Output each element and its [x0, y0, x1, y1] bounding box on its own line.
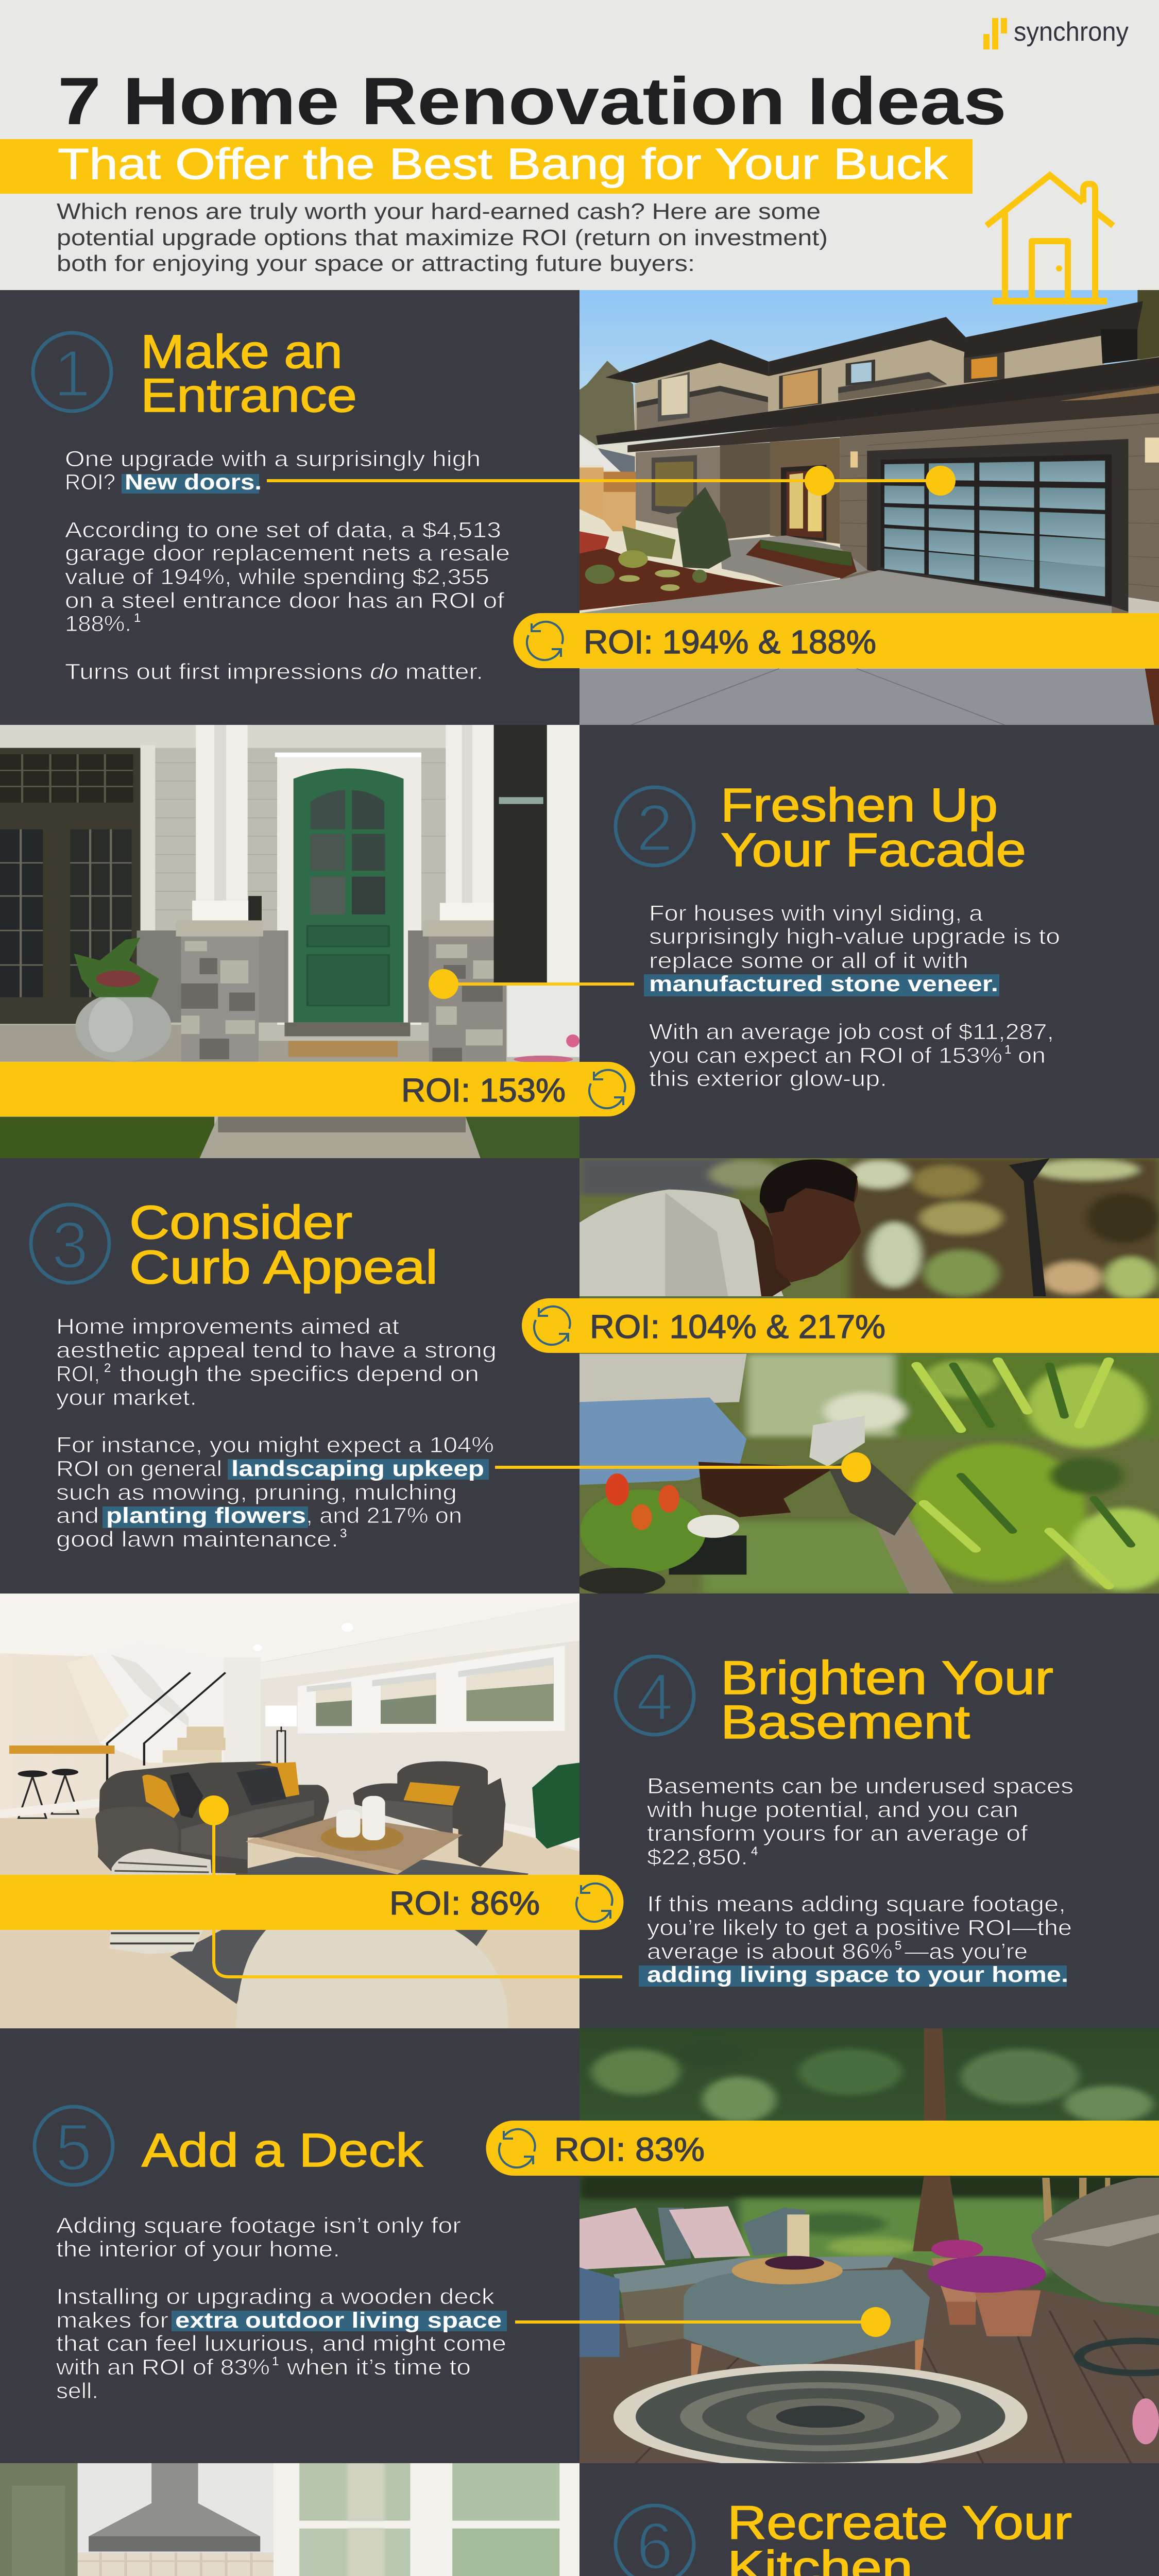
- body text: new doors: Turns out first impressions do matter.: [65, 659, 483, 684]
- body text: new doors: New doors.: [125, 470, 262, 495]
- body text: basements: adding living space to your home.: [647, 1962, 1068, 1987]
- ROI badge 5: [486, 2121, 1159, 2176]
- body text: stone veneer: you can expect an ROI of 153%: [649, 1043, 1002, 1068]
- step number 1: 1: [54, 337, 91, 411]
- step number 2: 2: [636, 791, 673, 865]
- icon: refresh arrows: [534, 1307, 570, 1345]
- body text: landscaping: [56, 1314, 497, 1552]
- panel 1: make an entrance: [0, 290, 1159, 725]
- body text: new doors: 188%.: [65, 612, 131, 636]
- callout line and dot: [199, 1795, 622, 1977]
- step number 6: [616, 2505, 694, 2576]
- icon: refresh arrows: [589, 1070, 625, 1108]
- callout line and dot: [515, 2307, 891, 2337]
- body text: stone veneer: For houses with vinyl siding, a: [649, 901, 983, 926]
- step number 1: [33, 333, 111, 411]
- panel 6: recreate your kitchen: [0, 2463, 1159, 2576]
- ROI badge 2: [0, 1062, 635, 1116]
- body text: basements: Basements can be underused spaces: [647, 1774, 1073, 1799]
- ROI badge 1: [513, 613, 1159, 668]
- subtitle band: [0, 139, 973, 194]
- body text: new doors: garage door replacement nets a resale: [65, 541, 510, 566]
- step number 5: [35, 2107, 113, 2185]
- ROI badge 3: ROI: 104% & 217%: [590, 1308, 885, 1345]
- ROI badge 2: ROI: 153%: [401, 1072, 566, 1109]
- body text: deck: extra outdoor living space: [175, 2308, 502, 2333]
- header logo: [983, 17, 1129, 49]
- panel 2: freshen up your facade: [0, 725, 1159, 1158]
- body text: basements: 5: [895, 1939, 901, 1953]
- icon: refresh arrows: [499, 2129, 535, 2167]
- step number 2: [616, 787, 694, 866]
- icon: refresh arrows: [576, 1884, 612, 1922]
- body text: stone veneer: on: [1018, 1043, 1046, 1068]
- heading: freshen up your facade: [721, 779, 1026, 876]
- ROI badge 3: [522, 1298, 1159, 1353]
- intro text: Which renos are truly worth your hard-earned cash? Here are some: [57, 199, 821, 224]
- body text: stone veneer: replace some or all of it with: [649, 948, 968, 973]
- body text: new doors: value of 194%, while spending $2,355: [65, 565, 489, 589]
- body text: landscaping: aesthetic appeal tend to have a strong: [56, 1338, 497, 1363]
- body text: new doors: According to one set of data, a $4,513: [65, 518, 501, 543]
- body text: new doors: ROI?: [65, 470, 115, 495]
- body text: deck: 1: [272, 2354, 279, 2368]
- body text: stone veneer: 1: [1004, 1043, 1011, 1057]
- body text: basements: 4: [751, 1844, 758, 1858]
- body text: stone veneer: this exterior glow-up.: [649, 1066, 887, 1091]
- body text: deck: makes for: [56, 2308, 168, 2333]
- body text: new doors: on a steel entrance door has an ROI of: [65, 588, 505, 613]
- body text: landscaping: though the specifics depend on: [120, 1362, 479, 1386]
- body text: deck: Adding square footage isn’t only for: [56, 2213, 461, 2238]
- photo: green front door and stone pillars: [0, 725, 580, 1158]
- body text: landscaping: 2: [104, 1361, 111, 1375]
- body text: deck: the interior of your home.: [56, 2237, 340, 2262]
- body text: deck: with an ROI of 83%: [56, 2355, 270, 2380]
- heading: brighten your basement: Brighten Your: [721, 1652, 1053, 1704]
- body text: stone veneer: surprisingly high-value upgrade is to: [649, 924, 1060, 949]
- title: 7 Home Renovation Ideas: [58, 63, 1007, 139]
- heading: brighten your basement: [721, 1652, 1053, 1749]
- panel 4: brighten your basement: [0, 1594, 1159, 2028]
- heading: freshen up your facade: Freshen Up: [721, 779, 998, 832]
- body text: landscaping: , and 217% on: [306, 1503, 462, 1528]
- callout line and dot: [429, 969, 634, 999]
- callout line and dot: [495, 1452, 871, 1482]
- body text: basements: with huge potential, and you can: [646, 1798, 1018, 1822]
- heading: freshen up your facade: Your Facade: [721, 824, 1026, 876]
- photo: deck with outdoor furniture: [580, 2028, 1159, 2463]
- body text: landscaping: such as mowing, pruning, mulching: [56, 1480, 457, 1505]
- body text: new doors: [65, 447, 510, 684]
- body text: basements: transform yours for an average of: [647, 1821, 1028, 1846]
- icon: refresh arrows: [527, 622, 563, 660]
- intro text: both for enjoying your space or attracting future buyers:: [57, 251, 695, 276]
- body text: basements: [639, 1774, 1073, 1987]
- body text: landscaping: planting flowers: [106, 1503, 306, 1528]
- icon: house outline: [986, 175, 1113, 304]
- body text: deck: when it’s time to: [286, 2355, 471, 2380]
- body text: deck: sell.: [56, 2379, 98, 2403]
- heading: add a deck: Add a Deck: [142, 2124, 423, 2177]
- panel 3: consider curb appeal: [0, 1158, 1159, 1596]
- body text: landscaping: and: [56, 1503, 99, 1528]
- panel 5: add a deck: [0, 2028, 1159, 2469]
- photo: kitchen with green cabinets: [0, 2463, 580, 2576]
- body text: basements: If this means adding square footage,: [647, 1892, 1066, 1917]
- body text: basements: —as you’re: [905, 1939, 1028, 1964]
- body text: landscaping: landscaping upkeep: [231, 1456, 484, 1481]
- heading: recreate your kitchen: Recreate Your: [727, 2497, 1072, 2549]
- body text: landscaping: For instance, you might expect a 104%: [56, 1433, 494, 1458]
- body text: new doors: One upgrade with a surprisingly high: [65, 447, 481, 471]
- heading: make an entrance: Entrance: [141, 369, 357, 422]
- heading: recreate your kitchen: [727, 2497, 1072, 2576]
- body text: deck: that can feel luxurious, and might come: [56, 2331, 506, 2356]
- body text: basements: average is about 86%: [647, 1939, 893, 1964]
- ROI badge 5: ROI: 83%: [554, 2131, 705, 2168]
- body text: landscaping: ROI on general: [56, 1456, 222, 1481]
- header logo: synchrony: [1014, 17, 1129, 47]
- body text: landscaping: good lawn maintenance.: [56, 1527, 338, 1552]
- body text: deck: Installing or upgrading a wooden deck: [56, 2284, 495, 2309]
- photo: modern house with garage door: [580, 290, 1159, 725]
- photo: man gardening: [580, 1158, 1159, 1594]
- body text: landscaping: ROI,: [56, 1362, 100, 1386]
- body text: landscaping: your market.: [56, 1385, 197, 1410]
- step number 4: 4: [636, 1660, 673, 1734]
- body text: basements: you’re likely to get a positive ROI—the: [647, 1916, 1072, 1940]
- body text: deck: [56, 2213, 507, 2403]
- callout line and dots: [267, 466, 956, 496]
- heading: make an entrance: [141, 326, 357, 422]
- body text: stone veneer: manufactured stone veneer.: [649, 972, 998, 996]
- body text: landscaping: 3: [340, 1527, 347, 1540]
- heading: consider curb appeal: Curb Appeal: [129, 1241, 438, 1294]
- body text: landscaping: Home improvements aimed at: [56, 1314, 399, 1339]
- subtitle band: That Offer the Best Bang for Your Buck: [58, 140, 948, 188]
- body text: new doors: 1: [134, 611, 141, 625]
- ROI badge 4: [0, 1875, 623, 1930]
- heading: consider curb appeal: [129, 1196, 438, 1294]
- intro text: [57, 199, 828, 276]
- step number 3: [31, 1205, 109, 1283]
- step number 5: 5: [55, 2111, 92, 2184]
- heading: make an entrance: Make an: [141, 326, 343, 378]
- body text: stone veneer: [644, 901, 1060, 1091]
- ROI badge 1: ROI: 194% & 188%: [584, 623, 876, 660]
- intro text: potential upgrade options that maximize ROI (return on investment): [57, 225, 828, 250]
- body text: stone veneer: With an average job cost of $11,287,: [649, 1020, 1054, 1044]
- body text: basements: $22,850.: [647, 1845, 748, 1870]
- heading: consider curb appeal: Consider: [129, 1196, 352, 1249]
- photo: finished basement living room: [0, 1594, 580, 2028]
- step number 4: [616, 1656, 694, 1735]
- heading: brighten your basement: Basement: [721, 1696, 970, 1749]
- ROI badge 4: ROI: 86%: [389, 1885, 540, 1922]
- step number 3: 3: [52, 1209, 89, 1282]
